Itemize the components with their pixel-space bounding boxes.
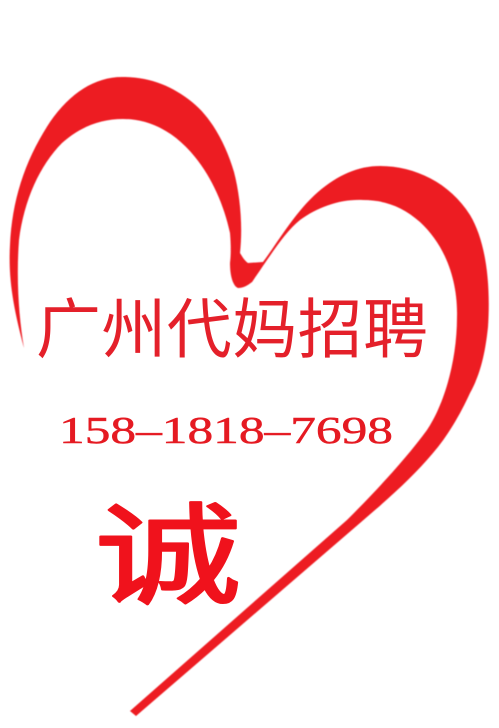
right lobe and tail of heart xyxy=(130,166,489,716)
phone number: 158–1818–7698 xyxy=(59,410,393,452)
left lobe of heart xyxy=(10,77,263,348)
heading: 广州代妈招聘: 广州代妈招聘 xyxy=(36,277,428,371)
large character: 诚: 诚 xyxy=(95,468,241,627)
